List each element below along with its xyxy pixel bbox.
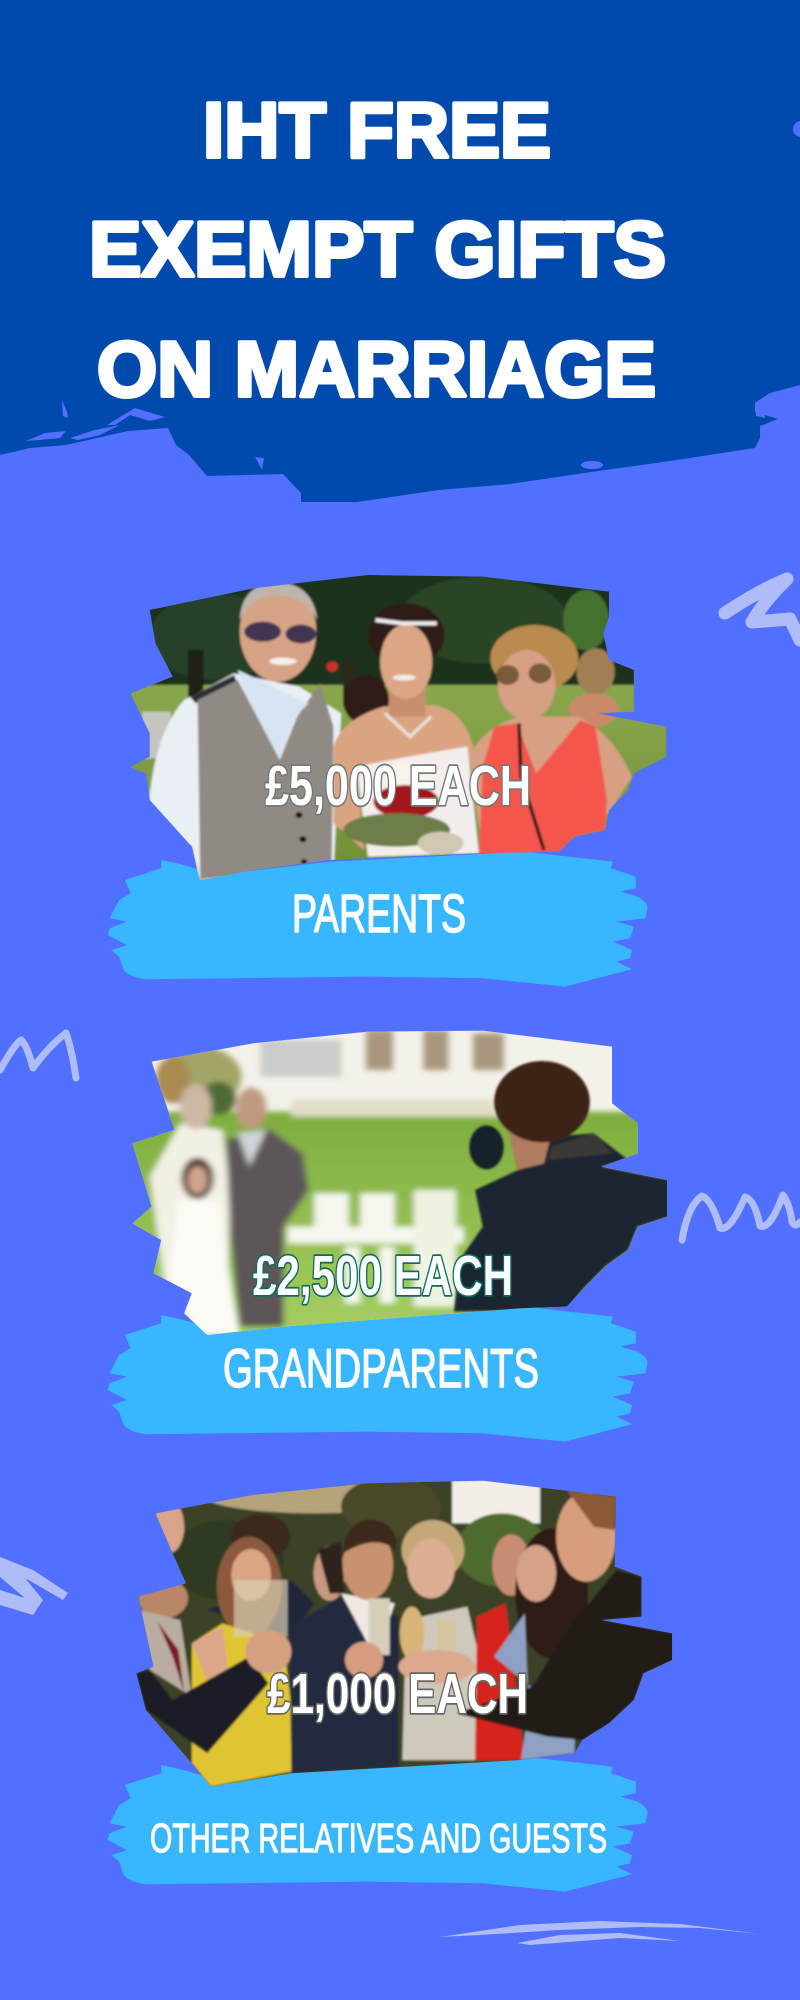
brush bar: other relatives xyxy=(108,1757,648,1892)
decorative dot xyxy=(793,121,800,137)
blurred family xyxy=(150,1123,230,1320)
amount: £5,000 each: £5,000 EACH xyxy=(265,754,531,818)
groom xyxy=(289,1597,399,1773)
photo: photographer at wedding xyxy=(123,1027,678,1345)
tall man xyxy=(456,1570,674,1740)
brush bar: grandparents xyxy=(108,1307,648,1442)
title: EXEMPT GIFTS xyxy=(89,205,666,293)
man xyxy=(148,673,341,880)
photo: parents with bride xyxy=(123,570,678,887)
amount: £1,000 each: £1,000 EACH xyxy=(267,1662,528,1726)
panel: parents xyxy=(108,570,678,987)
mother xyxy=(469,715,633,832)
title: ON MARRIAGE xyxy=(97,325,656,413)
header brush fragments xyxy=(26,400,765,470)
dark-haired woman xyxy=(515,1528,588,1658)
bride xyxy=(368,602,445,657)
other woman behind xyxy=(576,648,615,695)
back man xyxy=(231,1514,291,1559)
amount: £2,500 each: £2,500 EACH xyxy=(253,1244,513,1308)
label: other relatives and guests: OTHER RELATIVES AND GUESTS xyxy=(150,1815,607,1861)
background woman xyxy=(314,1546,346,1601)
header brush banner xyxy=(0,0,800,502)
panel: other relatives and guests xyxy=(108,1473,689,1892)
woman in yellow xyxy=(217,1537,282,1637)
decorative scribbles xyxy=(0,579,800,1945)
white chairs xyxy=(314,1193,349,1237)
title: IHT FREE xyxy=(203,86,551,174)
brush bar: parents xyxy=(108,852,648,987)
woman in red xyxy=(475,1603,525,1760)
label: grandparents: GRANDPARENTS xyxy=(223,1337,539,1399)
label: parents: PARENTS xyxy=(292,884,466,944)
photo: guests toasting xyxy=(123,1473,689,1793)
title xyxy=(89,86,666,413)
left man xyxy=(138,1578,188,1618)
bride xyxy=(402,1520,464,1580)
sleeve xyxy=(136,1657,268,1753)
panel: grandparents xyxy=(108,1027,678,1442)
